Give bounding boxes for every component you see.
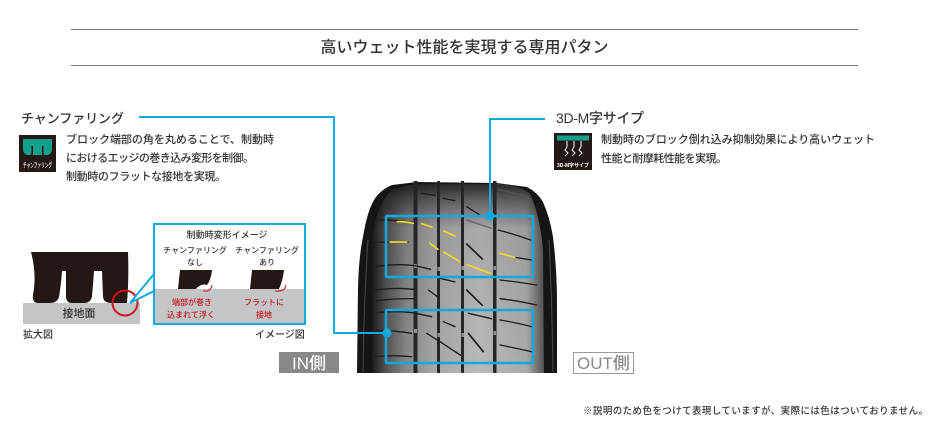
icon: chamfering: チャンファリング xyxy=(23,160,52,170)
callout: chamfering line xyxy=(139,117,392,338)
column: with chamfer: 接地 xyxy=(256,310,272,320)
highlighted yellow sipes xyxy=(390,222,515,273)
column: without chamfer: 込まれて浮く xyxy=(167,310,215,320)
highlight box: lower tread xyxy=(386,310,533,363)
column: with chamfer: フラットに xyxy=(244,298,284,307)
column: without chamfer xyxy=(163,245,227,320)
panel: 3D-M sipe description xyxy=(554,110,875,170)
panel: chamfering description xyxy=(19,111,274,183)
heading: chamfering: チャンファリング xyxy=(21,111,124,126)
magnifier circle xyxy=(112,290,138,316)
label: OUT side: OUT側 xyxy=(577,354,630,373)
tread surface xyxy=(372,184,544,373)
label: contact surface: 接地面 xyxy=(62,306,96,320)
heading: deformation image: 制動時変形イメージ xyxy=(187,229,267,240)
column: with chamfer: チャンファリング xyxy=(235,245,299,255)
text: chamfering body xyxy=(66,132,274,183)
column: without chamfer: チャンファリング xyxy=(163,245,227,255)
panel ground xyxy=(155,289,304,323)
column: with chamfer xyxy=(235,245,299,320)
text: chamfering body: 制動時のフラットな接地を実現。 xyxy=(66,169,226,183)
groove tie bars xyxy=(414,264,496,337)
footnote: ※説明のため色をつけて表現していますが、実際には色はついておりません。 xyxy=(583,405,928,417)
title: 高いウェット性能を実現する専用パタン xyxy=(320,38,609,56)
tire block cross section xyxy=(31,252,128,303)
icon: chamfering xyxy=(19,135,56,172)
column: without chamfer: なし xyxy=(187,258,203,267)
text: 3D-M sipe body: 制動時のブロック倒れ込み抑制効果により高いウェット xyxy=(601,132,875,146)
tread top shading xyxy=(372,184,544,373)
shoulder lines xyxy=(363,240,553,372)
label: IN side xyxy=(279,352,339,373)
text: 3D-M sipe body: 性能と耐摩耗性能を実現。 xyxy=(601,151,727,165)
text: chamfering body: ブロック端部の角を丸めることで、制動時 xyxy=(66,132,274,146)
label: enlarged view: 拡大図 xyxy=(23,328,53,341)
column: without chamfer: 端部が巻き xyxy=(172,297,212,307)
ground surface xyxy=(23,303,140,324)
panel frame xyxy=(154,224,305,324)
text: chamfering body: におけるエッジの巻き込み変形を制御。 xyxy=(66,150,254,164)
tire silhouette xyxy=(357,182,557,373)
text: 3D-M sipe body xyxy=(601,132,875,165)
diagram: enlarged tire contact xyxy=(23,252,140,341)
circumferential grooves xyxy=(414,181,496,373)
highlight box: upper tread xyxy=(386,216,533,277)
label: image view: イメージ図 xyxy=(255,329,305,341)
icon: 3D-M sipe xyxy=(554,133,592,170)
panel: deformation image xyxy=(130,224,305,341)
tire photo xyxy=(357,181,557,373)
label: IN side: IN側 xyxy=(292,354,326,373)
column: with chamfer: あり xyxy=(259,258,275,267)
sipes xyxy=(373,190,537,357)
heading: 3D-M sipe: 3D-M字サイプ xyxy=(556,110,644,126)
icon: 3D-M sipe: 3D-M字サイプ xyxy=(557,162,589,169)
callout: 3D-M line xyxy=(486,119,545,220)
callout wedge xyxy=(130,274,154,303)
